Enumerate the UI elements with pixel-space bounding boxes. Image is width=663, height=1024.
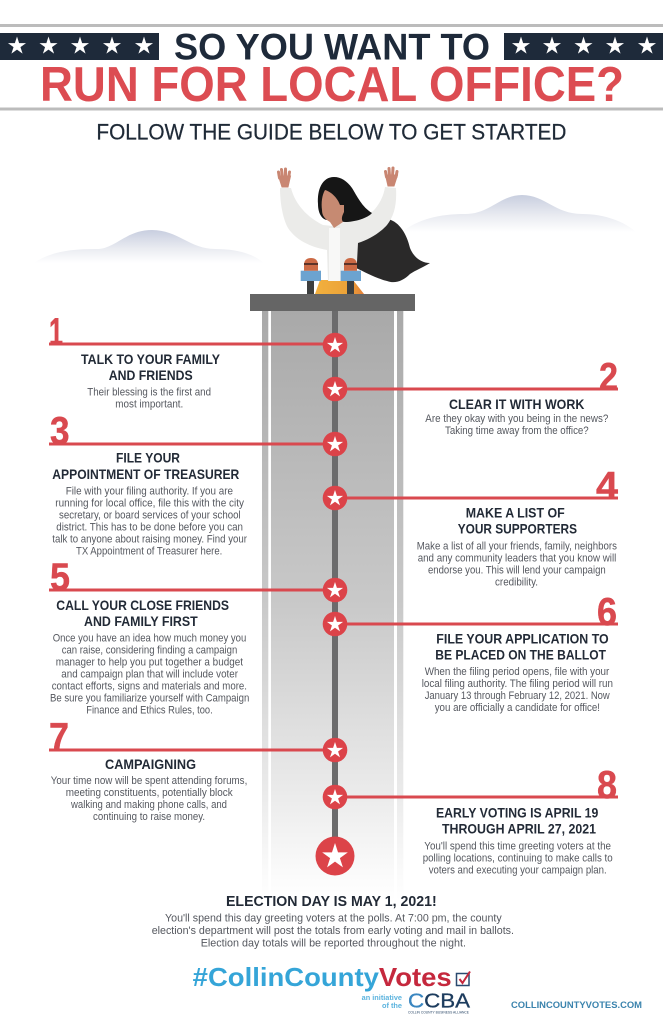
connector — [335, 496, 618, 500]
shirt placket — [329, 228, 340, 281]
heading — [436, 804, 598, 836]
left star band — [0, 33, 159, 60]
final star marker — [316, 836, 354, 876]
step 3 — [49, 410, 347, 558]
body — [52, 486, 247, 558]
face — [322, 190, 344, 228]
body: Are they okay with you being in the news? — [425, 413, 608, 425]
body: local filing authority. The filing period will run — [422, 678, 613, 690]
heading: CLEAR IT WITH WORK — [449, 396, 584, 412]
star marker — [323, 785, 347, 809]
number 4: 4 — [596, 465, 618, 508]
star marker — [323, 486, 347, 510]
election day — [152, 894, 514, 950]
initiative label: of the — [382, 1003, 402, 1010]
step 5 — [49, 556, 347, 716]
body: talk to anyone about raising money. Find your — [52, 534, 247, 546]
step 8 — [323, 764, 618, 876]
body: Once you have an idea how much money you — [53, 632, 246, 644]
body — [87, 386, 211, 410]
heading: MAKE A LIST OF — [466, 504, 565, 520]
body: can raise, considering finding a campaign — [62, 644, 237, 656]
body: File with your filing authority. If you are — [66, 486, 233, 498]
heading: APPOINTMENT OF TREASURER — [52, 466, 239, 482]
star marker — [323, 612, 347, 636]
footer logo — [193, 962, 471, 1014]
election body — [152, 912, 514, 950]
right hand — [386, 168, 398, 186]
step 6 — [323, 591, 618, 714]
CCBA logo: COLLIN COUNTY BUSINESS ALLIANCE — [408, 1010, 470, 1014]
heading: THROUGH APRIL 27, 2021 — [442, 820, 596, 836]
body: Taking time away from the office? — [445, 425, 589, 437]
heading: CAMPAIGNING — [105, 756, 196, 772]
heading: BE PLACED ON THE BALLOT — [435, 646, 606, 662]
election body: Election day totals will be reported throughout the night. — [201, 938, 466, 950]
number 7: 7 — [49, 716, 69, 759]
body — [417, 540, 618, 588]
heading: AND FAMILY FIRST — [84, 613, 198, 629]
heading: EARLY VOTING IS APRIL 19 — [436, 804, 598, 820]
body — [423, 840, 613, 876]
left microphone — [301, 258, 321, 295]
step 4 — [323, 465, 618, 588]
website: COLLINCOUNTYVOTES.COM — [511, 1000, 642, 1011]
number 3: 3 — [50, 410, 70, 453]
body: manager to help you put together a budget — [56, 656, 243, 668]
number 8: 8 — [597, 764, 617, 807]
title line 2: RUN FOR LOCAL OFFICE? — [40, 58, 624, 112]
body — [425, 413, 608, 437]
body: credibility. — [495, 576, 538, 588]
cloud right — [402, 195, 636, 232]
connector — [49, 748, 335, 752]
heading — [56, 597, 229, 629]
body — [50, 632, 249, 716]
connector — [335, 622, 618, 626]
heading: AND FRIENDS — [109, 367, 193, 383]
body: polling locations, continuing to make calls to — [423, 852, 613, 864]
title line 1: SO YOU WANT TO — [174, 26, 490, 68]
star marker — [323, 432, 347, 456]
number 6: 6 — [597, 591, 617, 634]
body: continuing to raise money. — [93, 811, 205, 823]
body: most important. — [115, 398, 183, 410]
star marker — [323, 377, 347, 401]
heading: YOUR SUPPORTERS — [458, 520, 577, 536]
number 5: 5 — [50, 556, 70, 599]
heading — [435, 630, 609, 662]
right microphone — [341, 258, 361, 295]
connector — [49, 442, 335, 446]
number 1: 1 — [49, 311, 63, 354]
step 2 — [323, 356, 618, 437]
body: district. This has to be done before you can — [56, 522, 243, 534]
skirt — [315, 280, 364, 294]
heading — [52, 450, 239, 482]
star marker — [323, 738, 347, 762]
body: endorse you. This will lend your campaign — [428, 564, 606, 576]
body: Finance and Ethics Rules, too. — [86, 704, 213, 716]
header banner — [0, 24, 663, 112]
head hair — [318, 177, 372, 222]
body: You'll spend this time greeting voters at the — [424, 840, 611, 852]
step 1 — [49, 311, 347, 410]
body: walking and making phone calls, and — [70, 799, 227, 811]
body: Make a list of all your friends, family, neighbors — [417, 540, 618, 552]
heading: TALK TO YOUR FAMILY — [81, 351, 221, 367]
hashtag: #CollinCounty Votes — [193, 962, 452, 992]
heading — [458, 504, 577, 536]
body: Your time now will be spent attending forums, — [51, 775, 247, 787]
subtitle: FOLLOW THE GUIDE BELOW TO GET STARTED — [96, 120, 566, 144]
right star band — [504, 33, 663, 60]
initiative label: an initiative — [362, 995, 402, 1002]
number 2: 2 — [599, 356, 618, 399]
body — [51, 775, 247, 823]
body: meeting constituents, potentially block — [66, 787, 233, 799]
body: running for local office, file this with the city — [55, 498, 245, 510]
body: When the filing period opens, file with your — [425, 666, 610, 678]
shirt — [280, 187, 396, 281]
CCBA logo: CCBA — [408, 991, 471, 1013]
heading: CALL YOUR CLOSE FRIENDS — [56, 597, 229, 613]
body: Be sure you familiarize yourself with Campaign — [50, 692, 249, 704]
body: voters and executing your campaign plan. — [429, 864, 607, 876]
body: and any community leaders that you know will — [418, 552, 616, 564]
connector — [49, 342, 335, 346]
star marker — [323, 578, 347, 602]
body: Their blessing is the first and — [87, 386, 211, 398]
election body: You'll spend this day greeting voters at the polls. At 7:00 pm, the county — [165, 912, 502, 924]
connector — [49, 588, 335, 592]
election heading: ELECTION DAY IS MAY 1, 2021! — [226, 894, 437, 910]
flowing hair — [356, 219, 430, 282]
cloud left — [34, 230, 264, 263]
step 7 — [49, 716, 347, 823]
connector — [335, 388, 618, 390]
election body: election's department will post the totals from early voting and mail in ballots. — [152, 925, 514, 937]
icon: checkbox — [456, 972, 470, 986]
star marker — [323, 333, 347, 357]
connector — [335, 796, 618, 798]
body: TX Appointment of Treasurer here. — [76, 546, 222, 558]
body: January 13 through February 12, 2021. Now — [425, 690, 610, 702]
heading — [81, 351, 221, 383]
heading: FILE YOUR — [116, 450, 180, 466]
heading: FILE YOUR APPLICATION TO — [436, 630, 609, 646]
illustration: woman at podium — [250, 168, 430, 311]
body: you are officially a candidate for office! — [435, 702, 600, 714]
left hand — [278, 169, 290, 187]
body: secretary, or board services of your school — [59, 510, 241, 522]
podium top — [250, 294, 415, 311]
body — [422, 666, 613, 714]
initiative label — [362, 995, 402, 1010]
body: and campaign plan that will include voter — [61, 668, 238, 680]
tower — [262, 311, 403, 901]
body: contact efforts, signs and materials and more. — [52, 680, 247, 692]
